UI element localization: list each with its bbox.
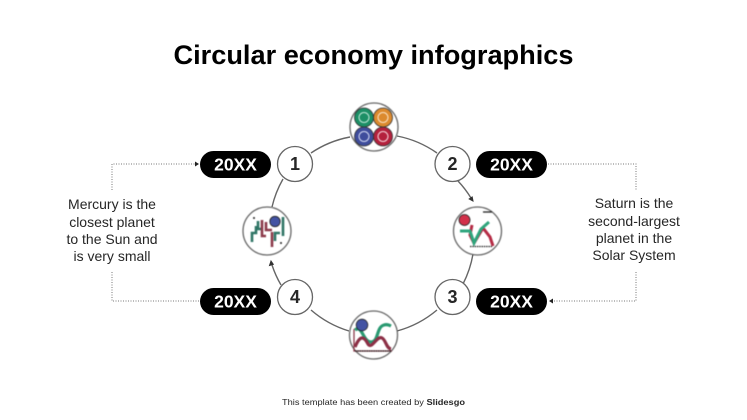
footer credit: This template has been created by Slidesgo: [282, 397, 465, 407]
number badge 4: 4: [290, 287, 300, 307]
circular ring with arrows: [270, 136, 473, 331]
text block: Mercury: is very small: [73, 248, 151, 264]
text block: Mercury: Mercury is the: [68, 196, 156, 212]
date pill 2: [476, 151, 547, 178]
icon: candlestick chart with coin: [243, 207, 291, 255]
text block: Saturn: Solar System: [592, 247, 676, 263]
date pill 4: 20XX: [214, 292, 257, 312]
text block: Mercury: [66, 196, 158, 264]
icon: line chart with coin: [454, 207, 502, 255]
left dotted connectors: [112, 164, 200, 301]
date pill 3: [476, 288, 547, 315]
date pill 3: 20XX: [490, 292, 533, 312]
date pill 4: [200, 288, 271, 315]
date pill 1: 20XX: [214, 154, 257, 174]
number badge 3: [435, 280, 470, 314]
number badge 1: [278, 146, 312, 182]
text block: Mercury: closest planet: [69, 214, 155, 230]
arrowhead: left top connector: [195, 162, 199, 166]
icon: four coins: [350, 103, 398, 151]
title: Circular economy infographics: [174, 40, 574, 70]
text block: Saturn: Saturn is the: [595, 195, 674, 211]
text block: Saturn: planet in the: [596, 230, 672, 246]
number badge 2: [435, 146, 470, 182]
icon: wavy area chart with coin: [350, 311, 398, 359]
number badge 3: 3: [447, 287, 458, 307]
number badge 4: [278, 280, 312, 314]
arrowhead: right bottom connector: [549, 298, 553, 304]
date pill 1: [200, 151, 271, 178]
text block: Saturn: [588, 195, 680, 263]
number badge 2: 2: [447, 154, 458, 174]
date pill 2: 20XX: [490, 154, 533, 174]
text block: Saturn: second-largest: [588, 213, 680, 229]
right dotted connectors: [548, 164, 636, 301]
number badge 1: 1: [290, 154, 300, 174]
text block: Mercury: to the Sun and: [66, 231, 158, 247]
